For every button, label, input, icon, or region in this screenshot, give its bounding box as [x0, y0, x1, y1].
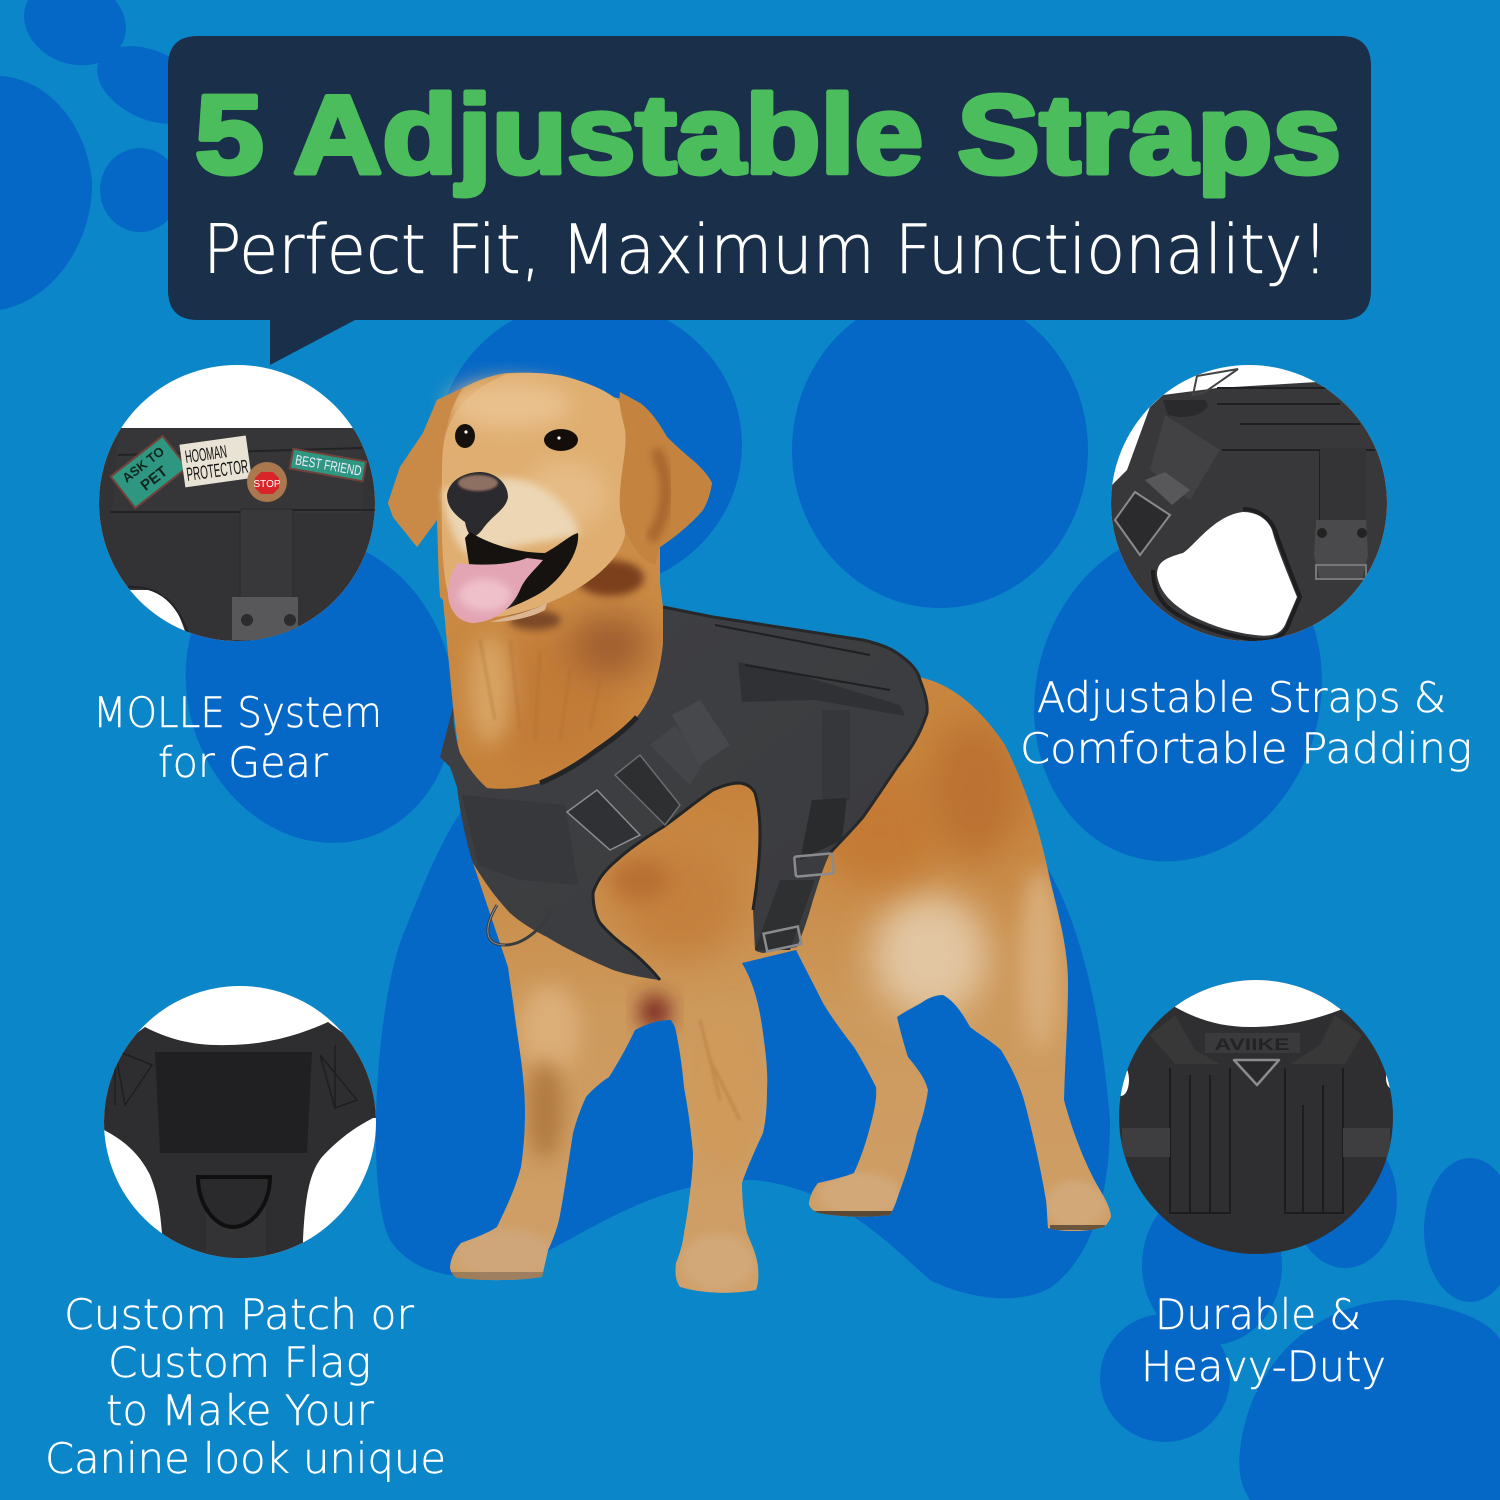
label: durable: Heavy-Duty [1141, 1342, 1386, 1391]
patch: best friend: BEST FRIEND [294, 451, 363, 479]
eye left [455, 424, 475, 448]
paw: top left [0, 0, 215, 310]
circle: MOLLE system [95, 360, 380, 650]
banner shape [168, 36, 1371, 365]
label: MOLLE: MOLLE System [93, 688, 382, 737]
chest panel [462, 795, 578, 885]
fur shading [450, 560, 1105, 1290]
tongue [448, 558, 543, 623]
harness body [440, 607, 927, 980]
left ear [388, 388, 463, 547]
D ring [488, 905, 552, 945]
eye right [544, 429, 578, 451]
dog face [388, 373, 712, 623]
label: custom patch [45, 1290, 446, 1483]
right ear [619, 392, 712, 565]
paw: bottom right [1100, 1132, 1500, 1500]
lower jaw [490, 603, 547, 622]
muzzle [442, 478, 580, 555]
fur streaks [480, 640, 740, 1120]
velcro panel [738, 662, 905, 716]
paw: centre [147, 292, 1359, 1298]
patch: hooman protector [179, 435, 252, 487]
patch: best friend [290, 449, 366, 481]
label: custom patch: Canine look unique [45, 1434, 446, 1483]
patch: hooman protector: PROTECTOR [185, 457, 250, 486]
label: custom patch: Custom Patch or [64, 1290, 415, 1339]
label: custom patch: Custom Flag [108, 1338, 371, 1387]
mouth [465, 532, 578, 610]
patch: stop [247, 462, 287, 502]
label: adjustable straps [1020, 673, 1472, 773]
patch: ask to pet [111, 436, 187, 508]
nose [447, 472, 508, 536]
icon: D ring [198, 1177, 270, 1227]
label: MOLLE [93, 688, 382, 787]
harness [440, 607, 927, 980]
patch: hooman protector: HOOMAN [184, 441, 228, 467]
label: durable: Durable & [1155, 1290, 1361, 1339]
label: adjustable straps: Comfortable Padding [1020, 724, 1472, 773]
dog body [380, 365, 1120, 1300]
patch: stop: STOP [253, 479, 281, 490]
label: MOLLE: for Gear [158, 738, 329, 787]
zipper edge [540, 717, 637, 783]
buckles [567, 790, 640, 850]
title banner [168, 36, 1371, 365]
patch: ask to pet: ASK TO [119, 444, 167, 485]
subtitle: Perfect Fit, Maximum Functionality! [203, 211, 1328, 290]
circle: adjustable straps [1111, 365, 1387, 641]
icon: triangle ring [1234, 1060, 1279, 1085]
title: 5 Adjustable Straps [195, 73, 1341, 197]
label: custom patch: to Make Your [106, 1386, 375, 1435]
label: durable [1141, 1290, 1386, 1391]
circle: custom patch [100, 985, 380, 1265]
circle: durable: AVIIKE [1214, 1035, 1290, 1054]
label: adjustable straps: Adjustable Straps & [1037, 673, 1446, 722]
dog in harness [380, 365, 1120, 1300]
patch: ask to pet: PET [137, 463, 171, 494]
circle: durable [1113, 975, 1400, 1260]
